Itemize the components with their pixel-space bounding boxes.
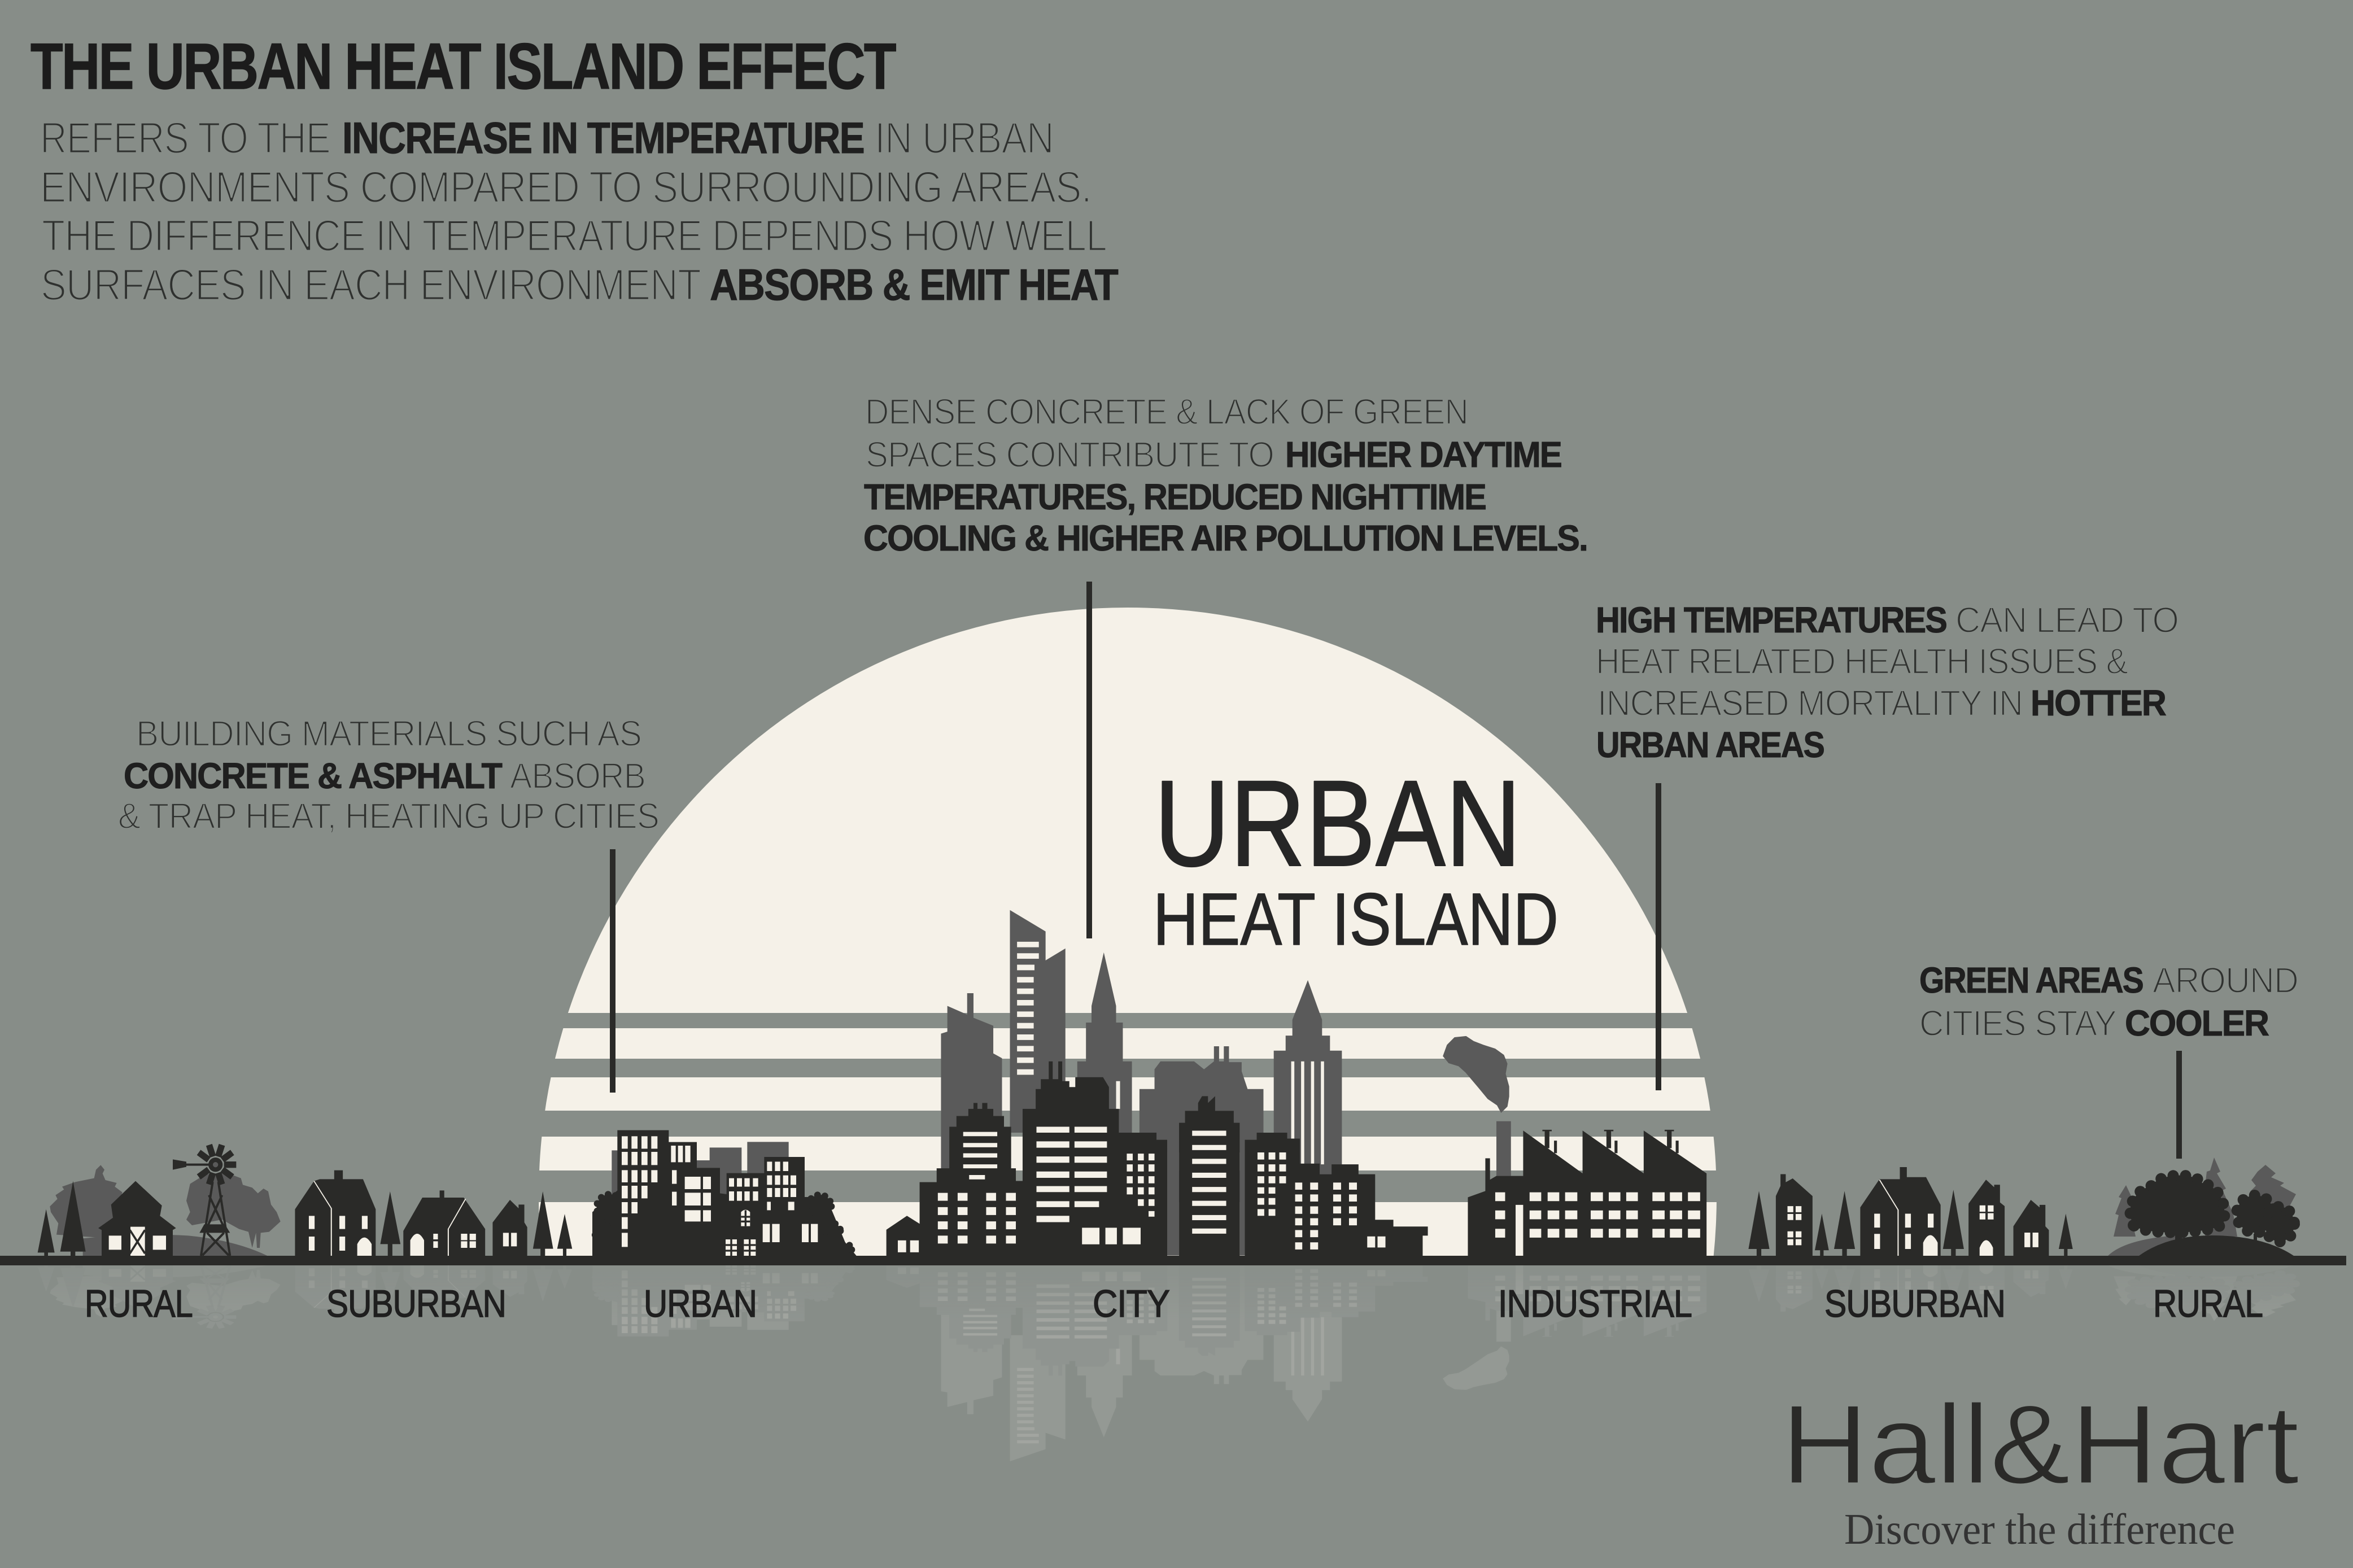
leader line: industrial xyxy=(1656,783,1661,1090)
background towers xyxy=(941,910,1342,1255)
urban buildings xyxy=(592,1130,857,1256)
logo: Discover the difference xyxy=(1844,1505,2235,1553)
callout: city: DENSE CONCRETE & LACK OF GREEN xyxy=(865,391,1468,432)
intro text: REFERS TO THE xyxy=(40,113,330,163)
callout: urban: BUILDING MATERIALS SUCH AS xyxy=(136,713,641,754)
sun semicircle with stripes xyxy=(508,608,1807,1256)
zone labels: INDUSTRIAL xyxy=(1498,1282,1692,1325)
logo: Hall&Hart xyxy=(1781,1382,2299,1508)
sun heading: HEAT ISLAND xyxy=(1153,877,1559,960)
factory with smoke xyxy=(1443,1036,1706,1256)
zone labels xyxy=(85,1282,2263,1325)
callout: urban: ABSORB xyxy=(510,755,645,796)
zone labels: CITY xyxy=(1093,1282,1169,1325)
callout: green areas: CITIES STAY xyxy=(1919,1003,2116,1043)
sun heading: URBAN xyxy=(1154,755,1521,892)
callout: green areas: AROUND xyxy=(2153,960,2298,1001)
callout: urban: CONCRETE & ASPHALT xyxy=(124,755,503,796)
callout: city: SPACES CONTRIBUTE TO xyxy=(866,434,1274,475)
callout: industrial: HIGH TEMPERATURES xyxy=(1596,600,1946,640)
zone labels: RURAL xyxy=(2153,1282,2263,1325)
intro text xyxy=(40,113,1118,309)
leader line: urban xyxy=(610,849,615,1093)
intro text: SURFACES IN EACH ENVIRONMENT xyxy=(41,260,701,309)
callout: urban: & TRAP HEAT, HEATING UP CITIES xyxy=(118,796,659,836)
callout: city: HIGHER DAYTIME xyxy=(1285,434,1561,475)
suburban left houses xyxy=(295,1170,572,1256)
leader line: city xyxy=(1086,582,1092,938)
rural left scene xyxy=(38,1145,281,1256)
water reflection of skyline xyxy=(38,1265,2296,1461)
intro text: ENVIRONMENTS COMPARED TO SURROUNDING AREAS. xyxy=(40,162,1092,212)
foreground buildings xyxy=(887,1062,1428,1256)
callout: industrial: CAN LEAD TO xyxy=(1955,600,2179,640)
zone labels: URBAN xyxy=(644,1282,757,1325)
callout: green areas xyxy=(1919,960,2298,1043)
intro text: ABSORB & EMIT HEAT xyxy=(710,260,1118,309)
callout: city: COOLING & HIGHER AIR POLLUTION LEVELS. xyxy=(863,518,1587,558)
suburban right houses xyxy=(1748,1167,2073,1256)
rural right trees and hill xyxy=(2108,1158,2296,1256)
intro text: INCREASE IN TEMPERATURE xyxy=(342,113,864,163)
callout: industrial: HOTTER xyxy=(2031,683,2166,723)
sun heading xyxy=(1153,755,1559,960)
skyline xyxy=(38,910,2296,1256)
callout: city: TEMPERATURES, REDUCED NIGHTTIME xyxy=(864,477,1486,517)
intro text: IN URBAN xyxy=(875,113,1054,163)
callout: urban xyxy=(118,713,659,836)
zone labels: RURAL xyxy=(85,1282,193,1325)
callout: industrial: HEAT RELATED HEALTH ISSUES & xyxy=(1596,641,2128,682)
city skyline xyxy=(887,910,1428,1256)
leader line: rural xyxy=(2176,1051,2182,1159)
ground line xyxy=(0,1256,2346,1265)
zone labels: SUBURBAN xyxy=(326,1282,506,1325)
callout: industrial xyxy=(1596,600,2179,765)
intro text: THE DIFFERENCE IN TEMPERATURE DEPENDS HOW WELL xyxy=(42,211,1107,260)
callout: green areas: COOLER xyxy=(2125,1003,2269,1043)
logo xyxy=(1781,1382,2299,1553)
callout: city xyxy=(863,391,1587,558)
zone labels: SUBURBAN xyxy=(1824,1282,2005,1325)
callout: industrial: URBAN AREAS xyxy=(1596,724,1824,765)
callout: green areas: GREEN AREAS xyxy=(1919,960,2143,1001)
title: THE URBAN HEAT ISLAND EFFECT xyxy=(30,30,896,103)
callout: industrial: INCREASED MORTALITY IN xyxy=(1597,683,2023,723)
